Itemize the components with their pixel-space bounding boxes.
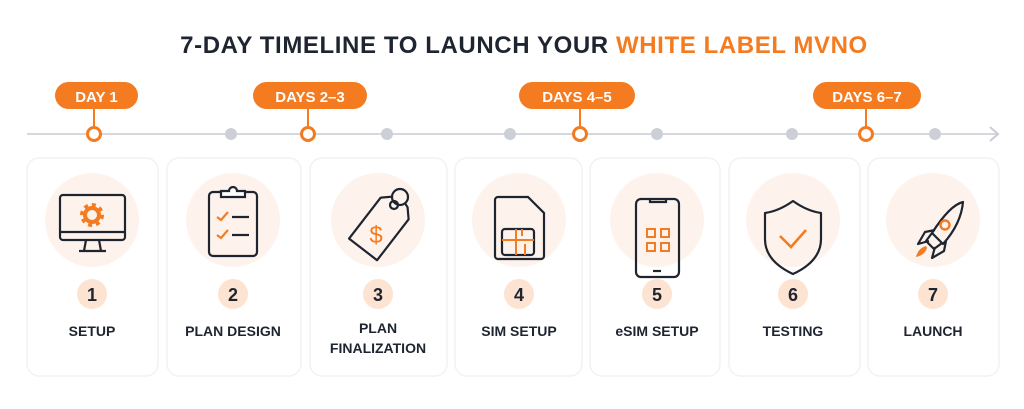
card 3: plan finalization: 3 (373, 285, 383, 305)
icon: price tag (346, 189, 412, 262)
icon: clipboard (209, 187, 257, 256)
pill: days 6-7 (813, 82, 921, 140)
card 3: plan finalization (310, 158, 447, 376)
card 5: esim setup: eSIM SETUP (615, 323, 699, 339)
card 4: sim setup: 4 (514, 285, 524, 305)
timeline (27, 127, 998, 141)
card 3: plan finalization: PLAN (359, 320, 397, 336)
card 3: plan finalization: FINALIZATION (330, 340, 426, 356)
icon: rocket (918, 202, 963, 258)
icon: sim card (495, 197, 544, 259)
card 6: testing (729, 158, 860, 376)
pill: days 6-7: DAYS 6–7 (832, 89, 902, 106)
pill: days 2-3 (253, 82, 367, 140)
card 5: esim setup (590, 158, 720, 376)
card 1: setup: SETUP (69, 323, 115, 339)
pill: day 1: DAY 1 (75, 89, 118, 106)
icon: monitor gear (60, 195, 125, 251)
card 4: sim setup: SIM SETUP (481, 323, 557, 339)
card 6: testing: 6 (788, 285, 798, 305)
icon: shield check (765, 201, 821, 274)
pill: days 4-5 (519, 82, 635, 140)
card 7: launch (868, 158, 999, 376)
card 6: testing: TESTING (763, 323, 823, 339)
card 2: plan design (167, 158, 301, 376)
card 1: setup (27, 158, 158, 376)
card 1: setup: 1 (87, 285, 97, 305)
card 2: plan design: 2 (228, 285, 238, 305)
pill: days 4-5: DAYS 4–5 (542, 89, 612, 106)
icon: phone (636, 199, 679, 277)
card 5: esim setup: 5 (652, 285, 662, 305)
card 7: launch: 7 (928, 285, 938, 305)
card 7: launch: LAUNCH (903, 323, 963, 339)
pill: days 2-3: DAYS 2–3 (275, 89, 345, 106)
title: 7-DAY TIMELINE TO LAUNCH YOUR WHITE LABEL MVNO (180, 32, 868, 59)
pill: day 1 (55, 82, 138, 140)
card 4: sim setup (455, 158, 582, 376)
card 3: plan finalization: $ (369, 222, 383, 249)
card 2: plan design: PLAN DESIGN (185, 323, 281, 339)
